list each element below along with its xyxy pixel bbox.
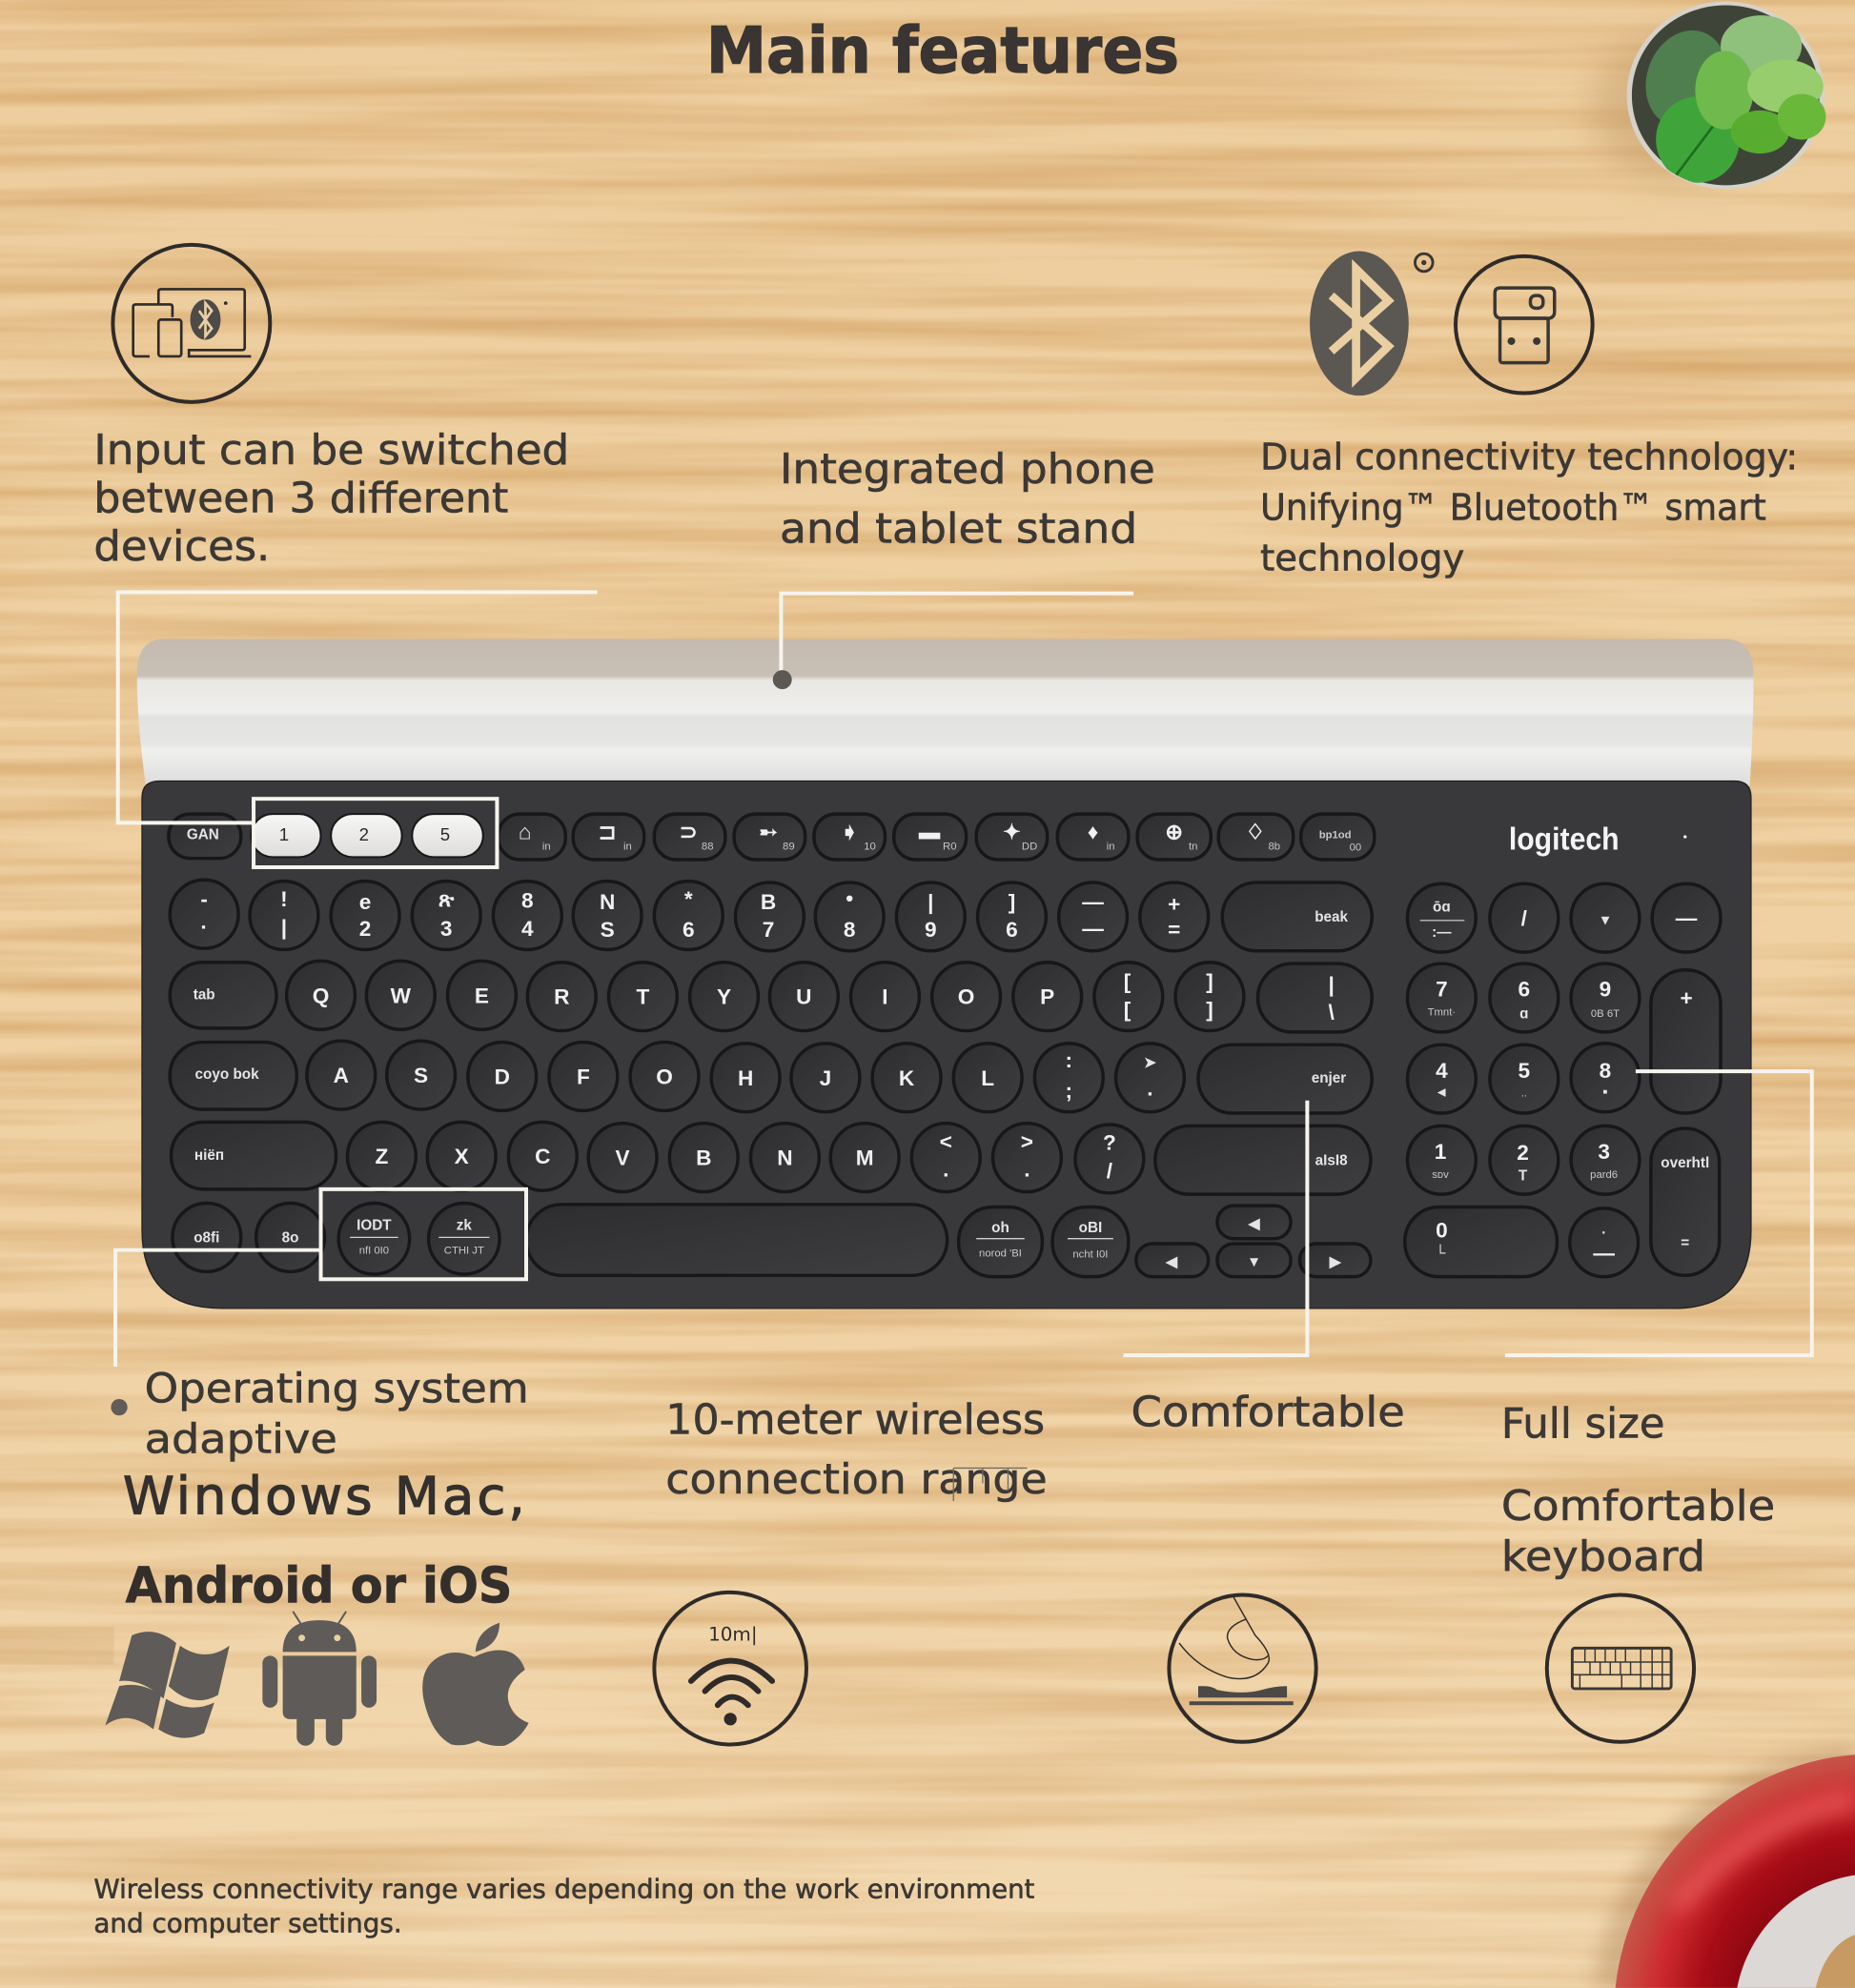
icon: unifying receiver	[1456, 256, 1593, 394]
key row: function keys: in	[623, 841, 632, 852]
key row: ZXCV: ?	[1103, 1131, 1116, 1155]
key row: ZXCV: X	[455, 1145, 469, 1168]
key row: function keys: R0	[943, 841, 957, 852]
key row: bottom: zk	[457, 1217, 472, 1233]
key row: numbers: —	[1082, 890, 1104, 914]
key row: numbers: 7	[763, 918, 774, 942]
icon: bluetooth	[1310, 252, 1433, 396]
key row: QWERTY: |	[1328, 972, 1335, 996]
key row: ZXCV: >	[1021, 1129, 1033, 1153]
key row: numbers: 2	[359, 917, 371, 941]
key row: function keys: ▬	[919, 821, 941, 844]
key row: QWERTY	[170, 961, 1372, 1032]
key row: QWERTY: [	[1124, 970, 1131, 994]
key row: bottom: 8o	[282, 1230, 299, 1247]
key row: numbers: B	[761, 890, 776, 914]
key row: bottom: IODT	[357, 1217, 392, 1233]
key row: QWERTY: O	[958, 985, 974, 1009]
title: Main features	[706, 13, 1179, 88]
key row: function keys: ➸	[760, 821, 779, 844]
key row: numbers: 8	[844, 918, 855, 942]
key row: ASDF: coyo bok	[195, 1066, 259, 1083]
numeric keypad: 9	[1600, 978, 1611, 1002]
key row: bottom: nfI 0I0	[359, 1246, 389, 1257]
key row: ASDF: A	[334, 1064, 349, 1087]
key row: ASDF: F	[577, 1065, 590, 1088]
key row: ZXCV: V	[616, 1146, 630, 1170]
numeric keypad: 7	[1436, 978, 1448, 1002]
text: phone and tablet stand: and tablet stand	[780, 504, 1137, 553]
key row: function keys: GAN	[187, 827, 219, 843]
icon: apple	[422, 1623, 529, 1746]
key row: ZXCV	[172, 1122, 1371, 1194]
key row: QWERTY: [	[1124, 998, 1131, 1022]
key row: numbers: e	[359, 890, 371, 914]
key row: numbers: +	[1168, 893, 1180, 917]
text: operating system adaptive: adaptive	[145, 1416, 337, 1464]
icon: 10m wifi: 10m|	[708, 1622, 758, 1645]
key row: numbers: 6	[683, 918, 695, 942]
key row: ASDF: S	[414, 1064, 428, 1087]
text: operating system adaptive: Operating system	[145, 1365, 529, 1412]
key row: function keys: 5	[440, 824, 450, 844]
text: wireless range: 10-meter wireless	[665, 1396, 1045, 1445]
numeric keypad: ·	[1601, 1225, 1606, 1241]
numeric keypad: ɑ	[1519, 1005, 1529, 1022]
key row: function keys: ♢	[1246, 821, 1265, 844]
numeric keypad: 4	[1436, 1059, 1448, 1083]
key row: function keys: bp1od	[1319, 829, 1352, 841]
icon: 10m wifi	[654, 1592, 806, 1744]
key row: function keys: 10	[864, 841, 876, 852]
numeric keypad: 5	[1519, 1059, 1530, 1083]
footnote: and computer settings.	[93, 1907, 402, 1938]
icon: multi-device switching	[112, 245, 270, 402]
key row: bottom: ◀	[1248, 1216, 1260, 1232]
keyboard body	[142, 781, 1751, 1308]
text: comfortable keyboard: keyboard	[1501, 1532, 1705, 1581]
key row: ZXCV: .	[943, 1158, 948, 1182]
key row: numbers: *	[684, 887, 693, 911]
text: full size: Full size	[1501, 1400, 1664, 1449]
key row: numbers: !	[280, 887, 288, 911]
key row: numbers: |	[281, 915, 287, 939]
key row: ZXCV: M	[856, 1146, 874, 1170]
photo: red cup	[1594, 1747, 1855, 1988]
key row: function keys: ✦	[1003, 821, 1021, 844]
key row: numbers: 4	[521, 917, 534, 941]
key row: function keys: ⊕	[1165, 821, 1183, 844]
text: wireless range: connection range	[665, 1455, 1048, 1504]
numeric keypad: =	[1681, 1235, 1689, 1251]
key row: ZXCV: N	[777, 1146, 793, 1170]
key row: QWERTY: ]	[1206, 970, 1213, 994]
numeric keypad: —	[1593, 1241, 1615, 1265]
text: dual connectivity: Dual connectivity technology:	[1260, 436, 1798, 478]
key row: QWERTY: U	[796, 985, 811, 1009]
numeric keypad: 8	[1600, 1059, 1611, 1083]
numeric keypad: └	[1436, 1245, 1446, 1262]
icon: comfortable finger	[1169, 1594, 1316, 1742]
text: phone and tablet stand: Integrated phone	[780, 445, 1155, 494]
logitech logo: logitech	[1509, 822, 1620, 857]
numeric keypad	[1405, 883, 1721, 1277]
numeric keypad: —	[1676, 906, 1698, 930]
key row: QWERTY: tab	[194, 986, 215, 1003]
key row: numbers: -	[200, 887, 208, 911]
key row: QWERTY: Q	[313, 984, 329, 1007]
icon: android	[262, 1612, 377, 1746]
key row: bottom: oh	[991, 1220, 1009, 1236]
numeric keypad: overhtl	[1661, 1155, 1709, 1171]
key row: ASDF: O	[656, 1065, 673, 1088]
key row: ASDF: ➤	[1144, 1055, 1156, 1071]
key row: function keys: 88	[702, 841, 714, 852]
numeric keypad: :—	[1432, 924, 1452, 941]
key row: bottom	[173, 1203, 1371, 1277]
key row: bottom: norod 'BI	[979, 1248, 1022, 1259]
key row: numbers: beak	[1315, 909, 1349, 925]
numeric keypad: ..	[1521, 1088, 1527, 1100]
key row: ASDF: :	[1066, 1048, 1072, 1072]
key row: numbers: 9	[925, 918, 937, 942]
text: input switching: Input can be switched	[93, 426, 569, 475]
numeric keypad: 0B 6T	[1591, 1008, 1620, 1020]
callout: OS adaptive keys	[111, 1189, 526, 1415]
key row: numbers: ·	[200, 915, 208, 939]
key row: numbers: 6	[1006, 918, 1018, 942]
numeric keypad: ōɑ	[1433, 900, 1451, 916]
callout: comfortable	[1124, 1101, 1307, 1355]
key row: numbers	[170, 880, 1372, 951]
numeric keypad: 3	[1598, 1140, 1610, 1164]
key row: function keys: ⊃	[680, 821, 698, 844]
key row: numbers: |	[928, 890, 933, 914]
key row: bottom: ◀	[1165, 1254, 1177, 1270]
text: input switching: between 3 different	[93, 475, 508, 523]
key row: numbers: 3	[440, 917, 452, 941]
keyboard stand	[137, 639, 1754, 786]
key row: numbers: =	[1168, 918, 1180, 942]
key row: QWERTY: I	[882, 985, 888, 1009]
key row: QWERTY: T	[636, 985, 649, 1009]
key row: function keys: 1	[279, 824, 289, 844]
key row: bottom: o8fi	[194, 1230, 219, 1247]
key row: ASDF: K	[899, 1066, 915, 1090]
photo: potted plant	[1591, 1, 1825, 189]
key row: function keys: 8b	[1269, 841, 1280, 852]
key row: numbers: •	[846, 886, 853, 910]
numeric keypad: +	[1680, 986, 1693, 1010]
numeric keypad: 2	[1517, 1141, 1529, 1165]
key row: QWERTY: R	[554, 985, 569, 1009]
numeric keypad: ▪	[1602, 1085, 1608, 1101]
key row: function keys: ♦	[1088, 821, 1098, 844]
key row: numbers: —	[1082, 917, 1104, 941]
key row: numbers: ]	[1009, 890, 1015, 914]
key row: bottom: ▼	[1247, 1254, 1261, 1270]
footnote: Wireless connectivity range varies depending on the work environment	[93, 1873, 1034, 1904]
key row: ASDF: J	[820, 1066, 831, 1090]
key row: function keys: in	[542, 841, 551, 852]
key row: ZXCV: aIsI8	[1315, 1153, 1348, 1169]
key row: ASDF: ;	[1066, 1079, 1072, 1103]
key row: ASDF: D	[495, 1065, 510, 1088]
key row: function keys: 89	[783, 841, 795, 852]
key row: ASDF	[170, 1041, 1372, 1113]
key row: function keys: in	[1107, 841, 1115, 852]
key row: QWERTY: P	[1040, 985, 1054, 1009]
numeric keypad: 1	[1435, 1140, 1446, 1164]
numeric keypad: sᴅᴠ	[1432, 1169, 1449, 1181]
key row: ASDF: .	[1147, 1076, 1153, 1100]
logitech logo	[1509, 822, 1686, 857]
key row: numbers: N	[600, 890, 615, 914]
key row: ASDF: enjer	[1312, 1070, 1346, 1086]
key row: function keys	[169, 814, 1375, 860]
numeric keypad: T	[1519, 1168, 1528, 1185]
key row: ZXCV: C	[535, 1145, 550, 1168]
numeric keypad: pard6	[1590, 1169, 1618, 1181]
numeric keypad: ◂	[1437, 1085, 1446, 1101]
key row: ZXCV: .	[1024, 1158, 1030, 1182]
numeric keypad: Tmnt·	[1428, 1007, 1456, 1019]
key row: bottom: ▶	[1329, 1254, 1342, 1270]
key row: function keys: ➧	[841, 821, 859, 844]
key row: numbers: ጽ	[438, 887, 456, 911]
text: comfortable keyboard: Comfortable	[1501, 1482, 1775, 1531]
numeric keypad: ▾	[1600, 912, 1609, 928]
text: dual connectivity: technology	[1260, 538, 1464, 580]
key row: numbers: S	[601, 918, 615, 942]
key row: QWERTY: \	[1329, 1001, 1335, 1024]
key row: numbers: 8	[521, 889, 534, 913]
icon: keyboard	[1547, 1594, 1694, 1742]
key row: function keys: tn	[1189, 841, 1197, 852]
callout: stand	[773, 594, 1133, 689]
text: Windows Mac: Windows Mac,	[123, 1465, 525, 1526]
key row: function keys: ⌂	[519, 821, 532, 844]
text: dual connectivity: Unifying™ Bluetooth™ smart	[1260, 487, 1766, 530]
key row: ASDF: H	[738, 1066, 753, 1090]
numeric keypad: 6	[1519, 978, 1530, 1002]
key row: bottom: ncht I0I	[1072, 1249, 1108, 1261]
numeric keypad: 0	[1436, 1218, 1448, 1242]
key row: QWERTY: E	[475, 984, 489, 1007]
key row: ZXCV: <	[940, 1129, 952, 1153]
numeric keypad: /	[1521, 906, 1528, 930]
key row: QWERTY: ]	[1206, 998, 1213, 1022]
key row: bottom: oBI	[1079, 1220, 1102, 1236]
key row: ASDF: L	[981, 1066, 994, 1090]
key row: function keys: 2	[359, 824, 369, 844]
text: Android or iOS: Android or iOS	[126, 1557, 512, 1614]
key row: ZXCV: B	[696, 1146, 711, 1170]
text: input switching: devices.	[93, 522, 270, 571]
key row: bottom: CTHI JT	[444, 1246, 484, 1257]
key row: function keys: DD	[1022, 841, 1037, 852]
icon: windows	[105, 1632, 230, 1738]
key row: ZXCV: ніёп	[194, 1147, 224, 1164]
key row: QWERTY: W	[391, 984, 412, 1007]
key row: QWERTY: Y	[717, 985, 731, 1009]
key row: ZXCV: /	[1107, 1159, 1113, 1183]
key row: function keys: 00	[1350, 842, 1361, 854]
key row: function keys: ⊐	[599, 821, 617, 844]
text: comfortable: Comfortable	[1131, 1389, 1405, 1437]
callout: full size	[1505, 1071, 1812, 1355]
key row: ZXCV: Z	[375, 1145, 388, 1168]
callout: device switch keys	[118, 592, 597, 867]
